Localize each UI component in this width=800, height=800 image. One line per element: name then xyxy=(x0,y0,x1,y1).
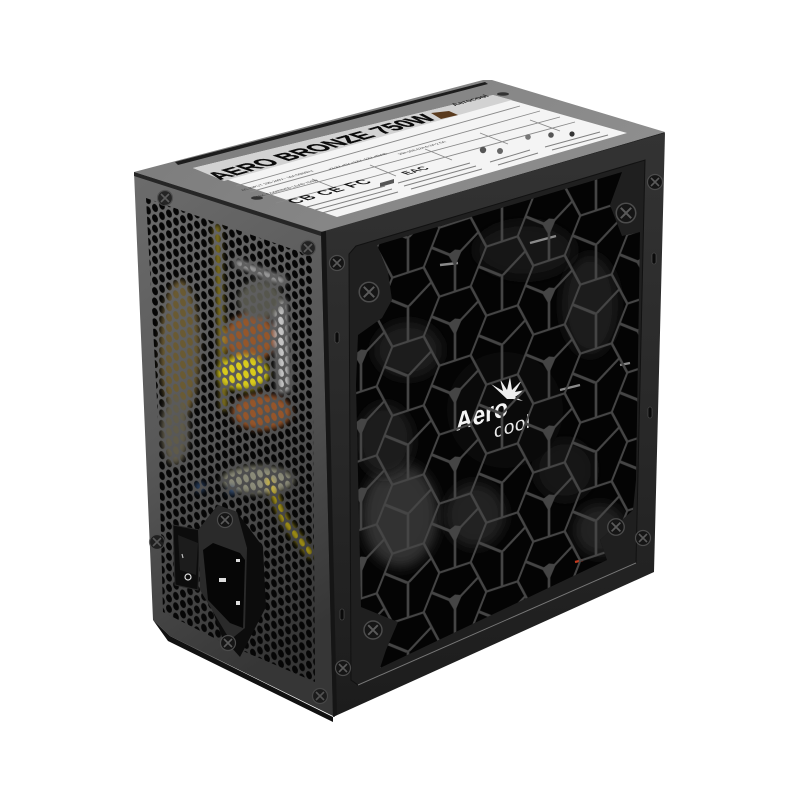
panel: front fan face xyxy=(321,133,665,717)
certification marks: CB CE FC xyxy=(283,178,377,205)
product label: +3.3V +5V +12V -12V +5Vsb xyxy=(326,152,389,170)
illustration: power supply unit xyxy=(134,80,665,722)
product label xyxy=(193,94,627,217)
brand logo on hub: cool xyxy=(494,411,530,443)
fan grille xyxy=(356,172,640,668)
plate screws xyxy=(359,282,379,302)
brand logo on hub: Aero xyxy=(456,392,508,437)
power switch xyxy=(173,525,200,590)
side slots xyxy=(335,253,656,620)
power inlet socket xyxy=(198,505,266,657)
label title: AERO BRONZE 750W xyxy=(201,112,444,182)
slots xyxy=(186,193,198,197)
panel: top face xyxy=(134,80,665,236)
warning text xyxy=(307,132,608,213)
label specification text: AC INPUT 100-240V~ 10A 50/60Hz xyxy=(239,170,316,191)
body screws xyxy=(330,256,344,270)
honeycomb guard xyxy=(356,180,640,668)
brand mark: Aerocool xyxy=(449,94,491,107)
brand logo on hub xyxy=(456,378,529,437)
specification table xyxy=(236,106,575,203)
product label: EAC xyxy=(399,166,433,176)
product label: 20A 20A 62A 0.3A 2.5A xyxy=(396,140,448,155)
product label: MAX. COMBINED LOAD 750W xyxy=(252,179,320,198)
bronze badge xyxy=(431,111,458,119)
perforated vent with components visible behind xyxy=(146,198,315,682)
recessed plate xyxy=(349,160,645,685)
vent screws xyxy=(158,190,172,206)
panel: left perforated side xyxy=(130,172,335,722)
plate highlight edge xyxy=(358,563,636,685)
fan blades xyxy=(357,222,630,567)
back lip line xyxy=(175,82,488,165)
